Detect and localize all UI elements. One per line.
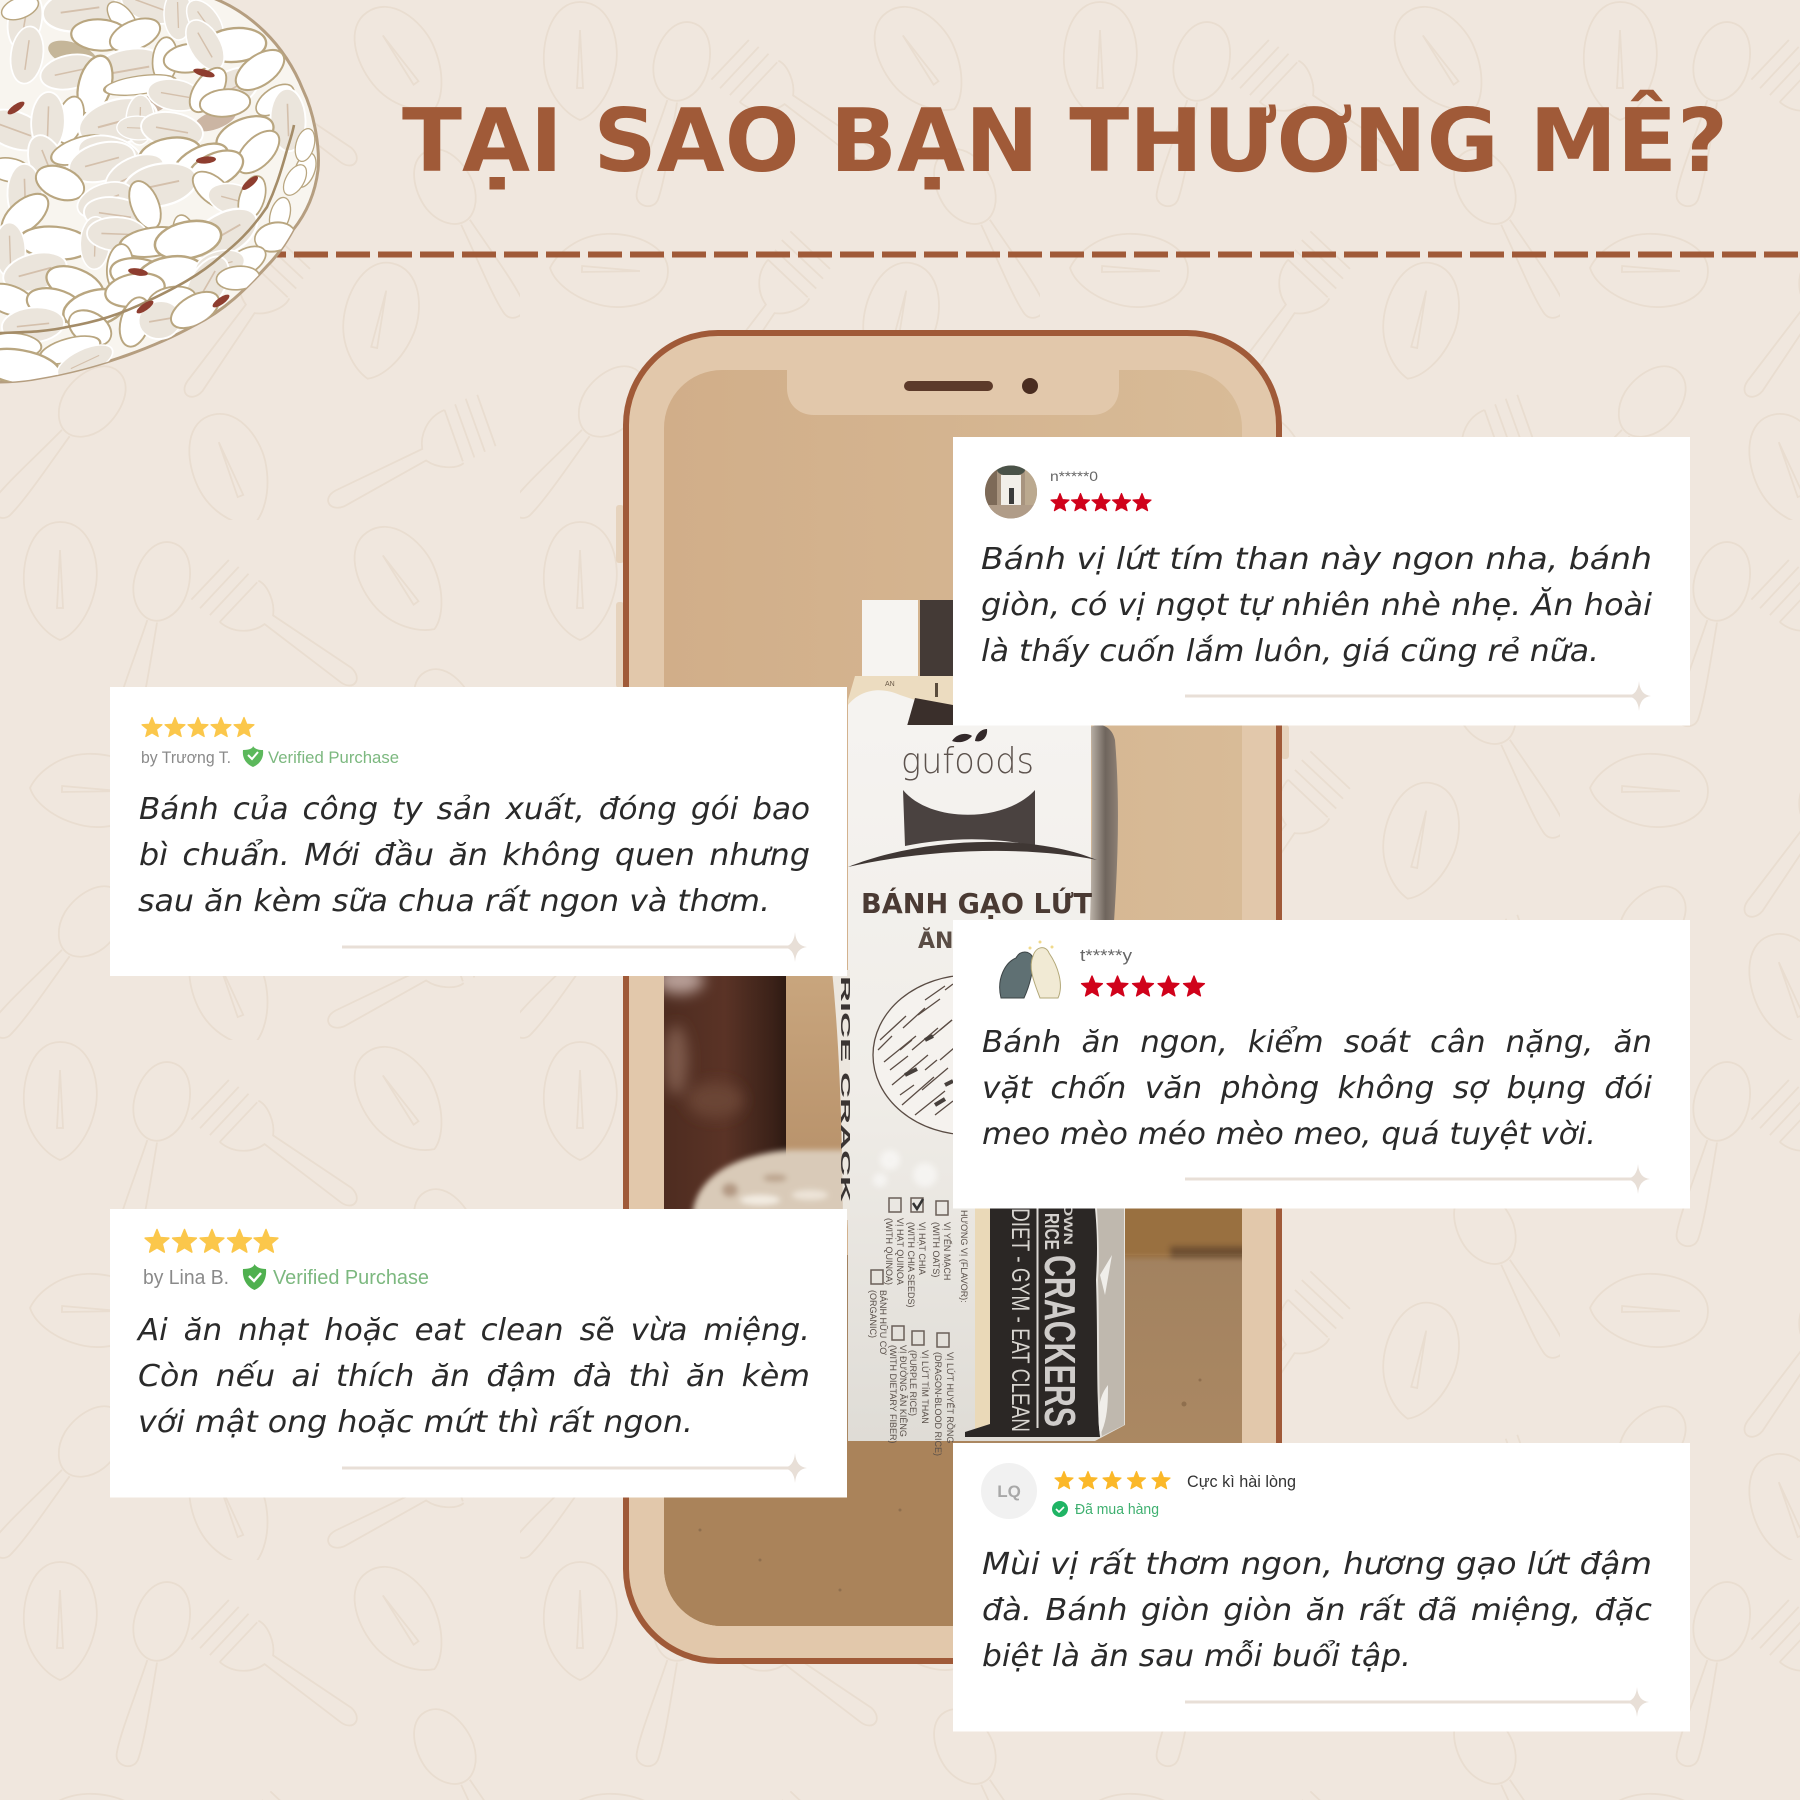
review text [982, 1547, 1653, 1674]
divider with sparkle [342, 932, 807, 962]
bag flavour list: VỊ HẠT QUINOA [895, 1218, 905, 1285]
bag logo [903, 790, 1035, 846]
review text: Bánh vị lứt tím than này ngon nha, bánh [981, 542, 1652, 577]
blurred rice cake in background [692, 1150, 850, 1225]
avatar: LQ [981, 1463, 1037, 1519]
reviewer name: by Lina B. [143, 1267, 229, 1289]
phone notch [787, 367, 1119, 415]
phone side buttons [616, 505, 1289, 759]
review text: Bánh ăn ngon, kiểm soát cân nặng, ăn [982, 1024, 1652, 1060]
bag flavour list: BÁNH HỮU CƠ [878, 1290, 888, 1355]
illustration: rice cake [0, 0, 320, 391]
reviewer name: n*****0 [1050, 468, 1098, 484]
divider with sparkle [342, 1453, 807, 1483]
review text [981, 542, 1653, 669]
icon: verified check [1052, 1501, 1068, 1517]
review text: Ai ăn nhạt hoặc eat clean sẽ vừa miệng. [136, 1313, 810, 1348]
paper bag: gufoods [901, 741, 1034, 782]
review headline: Cực kì hài lòng [1187, 1472, 1296, 1491]
bag dark panel: BROWN [1061, 1178, 1075, 1245]
paper bag [832, 600, 1125, 1456]
review text: Còn nếu ai thích ăn đậm đà thì ăn kèm [138, 1359, 810, 1394]
bag flavour list: (WITH OATS) [931, 1222, 941, 1277]
review card: LQ [953, 1443, 1690, 1732]
review text: là thấy cuốn lắm luôn, giá cũng rẻ nữa. [981, 634, 1599, 669]
phone camera [1022, 378, 1038, 394]
review card: n*****0 [953, 437, 1690, 726]
bag dark panel: RICE [1040, 1213, 1062, 1250]
review card: Trương T. [110, 687, 847, 976]
dashed divider [252, 252, 1800, 258]
review text: với mật ong hoặc mứt thì rất ngon. [138, 1405, 693, 1440]
bag flavour list [868, 1210, 969, 1456]
bag flavour list: VỊ YẾN MẠCH [942, 1222, 952, 1280]
verified label: Verified Purchase [268, 748, 399, 767]
divider with sparkle [1185, 681, 1651, 711]
bag flavour list: (PURPLE RICE) [908, 1350, 918, 1416]
purchased label: Đã mua hàng [1075, 1501, 1159, 1518]
bag flavour list: VỊ HẠT CHIA [917, 1222, 927, 1275]
bag heading: BÁNH GẠO LỨT [861, 886, 1092, 920]
review text: giòn, có vị ngọt tự nhiên nhè nhẹ. Ăn hoài [981, 587, 1653, 623]
review text: vặt chốn văn phòng không sợ bụng đói [982, 1071, 1653, 1106]
review text: biệt là ăn sau mỗi buổi tập. [982, 1638, 1411, 1674]
bag flavour list: VỊ ĐƯỜNG ĂN KIÊNG [898, 1345, 908, 1437]
bag upper fold [862, 600, 918, 676]
bag flavour list: (WITH QUINOA) [884, 1218, 894, 1285]
rating stars [1055, 1472, 1170, 1489]
avatar: LQ: LQ [997, 1482, 1021, 1501]
review text [138, 792, 810, 919]
phone speaker [904, 381, 993, 391]
review card: Lina B. [110, 1209, 847, 1498]
avatar [985, 464, 1037, 519]
paper bag: RICE CRACK [838, 976, 853, 1204]
review text: Mùi vị rất thơm ngon, hương gạo lứt đậm [982, 1547, 1652, 1582]
product photo [650, 370, 1255, 1635]
title: TẠI SAO BẠN THƯƠNG MÊ? [402, 90, 1728, 192]
reviewer name: by Trương T. [141, 748, 231, 767]
rating stars [142, 718, 254, 736]
bag flavour list: VỊ LỨT HUYẾT RỒNG [945, 1352, 956, 1443]
review card: t*****y [953, 920, 1690, 1208]
bag dark panel: CRACKERS [1035, 1255, 1084, 1427]
divider with sparkle [1185, 1687, 1649, 1717]
bag flavour list: (WITH CHIA SEEDS) [906, 1222, 916, 1308]
review text: sau ăn kèm sữa chua rất ngon và thơm. [138, 884, 770, 919]
avatar: two cats [1000, 940, 1060, 998]
divider with sparkle [1185, 1164, 1650, 1194]
icon: verified shield [243, 746, 263, 767]
review text: bì chuẩn. Mới đầu ăn không quen nhưng [139, 837, 810, 873]
paper bag: AN [885, 681, 895, 688]
bag dark panel [965, 1208, 1124, 1437]
bag body [848, 725, 1125, 1441]
review text: meo mèo méo mèo meo, quá tuyệt vời. [982, 1117, 1596, 1152]
paper bag: ĂN [918, 928, 953, 954]
rating stars [1082, 976, 1204, 996]
bag flavour list: (ORGANIC) [868, 1290, 878, 1338]
bag side gusset left [832, 970, 850, 1220]
phone body [626, 333, 1279, 1661]
bag flavour list: HƯƠNG VỊ (FLAVOR): [959, 1210, 969, 1303]
bag flavour list: (DRAGON-BLOOD RICE) [933, 1352, 943, 1456]
bag flavour list: VỊ LỨT TÍM THAN [920, 1350, 930, 1424]
bag dark panel: DIET - GYM - EAT CLEAN [1006, 1208, 1034, 1432]
bag flavour list: (WITH DIETARY FIBER) [888, 1345, 898, 1444]
bag flavour checkboxes [871, 1198, 949, 1347]
phone mockup [616, 333, 1289, 1661]
review text [136, 1313, 810, 1440]
bag rice drawing [872, 976, 953, 1134]
review text: Bánh của công ty sản xuất, đóng gói bao [139, 792, 810, 827]
reviewer name: t*****y [1080, 946, 1133, 965]
verified label: Verified Purchase [273, 1267, 429, 1289]
rating stars [145, 1230, 278, 1252]
review text [982, 1024, 1653, 1152]
icon: verified shield [243, 1264, 266, 1290]
review text: đà. Bánh giòn giòn ăn rất đã miệng, đặc [982, 1593, 1653, 1628]
rating stars [1051, 494, 1151, 511]
bag side gusset right [1090, 725, 1118, 922]
